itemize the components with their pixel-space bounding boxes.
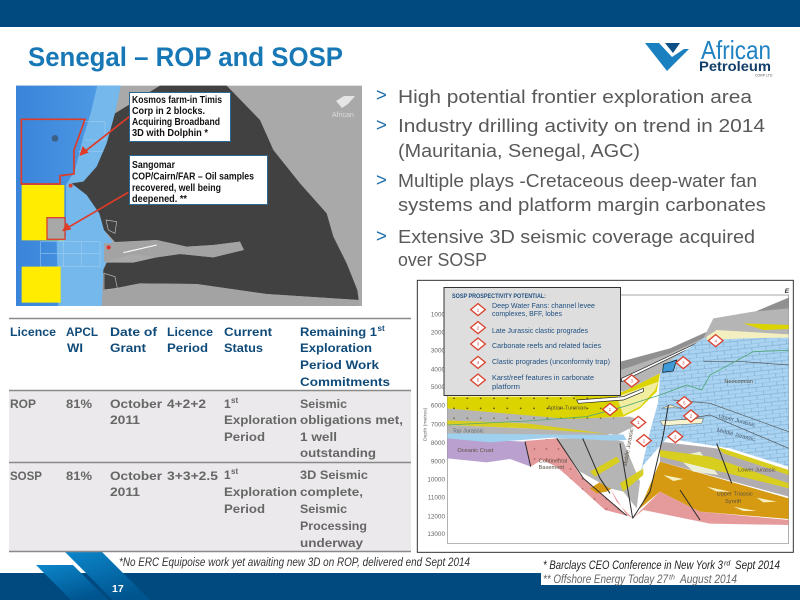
bottom footer band <box>0 573 800 600</box>
depth axis: 1000 <box>431 311 445 318</box>
table row: ROP: outstanding <box>300 446 376 460</box>
table header row: Licence <box>167 325 213 339</box>
bullet list: > <box>376 225 387 246</box>
bullet list: systems and platform margin carbonates <box>398 194 766 215</box>
callout: Kosmos farm-in: 3D with Dolphin * <box>132 128 208 139</box>
depth axis: 8000 <box>431 440 445 447</box>
formation labels: Upper Jurassic <box>718 414 756 429</box>
table row: ROP: 1 <box>224 397 231 411</box>
bullet list: > <box>376 114 387 135</box>
callout: Sangomar: COP/Cairn/FAR – Oil samples <box>132 172 254 182</box>
table header row: Current <box>224 325 272 339</box>
footnotes: sources <box>541 556 800 586</box>
callout: Sangomar: Sangomar <box>132 160 175 171</box>
footnotes: sources: August 2014 <box>679 574 737 586</box>
footnotes: sources: th <box>669 574 675 582</box>
numbered diamond markers: 5 <box>683 400 686 405</box>
table row: SOSP: 3+3+2.5 <box>167 469 218 483</box>
panel: Senegal map <box>16 86 362 306</box>
table row: ROP: Seismic <box>300 397 347 411</box>
formation labels: Continental <box>539 458 567 464</box>
bullet list: (Mauritania, Senegal, AGC) <box>398 140 640 161</box>
footnotes: sources: rd <box>724 560 731 568</box>
bullet list: High potential frontier exploration area <box>398 86 753 107</box>
table row: ROP: October <box>110 397 162 411</box>
table row: SOSP: st <box>231 467 238 476</box>
legend: SOSP prospectivity potential: Clastic progrades (unconformity trap) <box>492 359 610 366</box>
depth axis: 7000 <box>431 421 445 428</box>
legend: SOSP prospectivity potential: Carbonate reefs and related facies <box>492 343 602 350</box>
footnotes: sources: Sept 2014 <box>735 560 780 572</box>
legend: SOSP prospectivity potential: Late Jurassic clastic progrades <box>492 328 588 335</box>
callout: Kosmos farm-in <box>130 92 230 142</box>
callout: Kosmos farm-in: Acquiring Broadband <box>132 117 220 128</box>
table row: ROP: Exploration <box>224 413 297 427</box>
numbered diamond markers: 1 <box>609 407 612 412</box>
table row: ROP: Period <box>224 430 265 444</box>
table header row: Status <box>224 341 263 355</box>
table header row: Remaining 1 <box>300 325 377 339</box>
legend: SOSP prospectivity potential: SOSP PROSPECTIVITY POTENTIAL: <box>452 293 546 300</box>
footnotes: sources: ** Offshore Energy Today 27 <box>543 574 669 586</box>
legend: SOSP prospectivity potential: 4 <box>477 360 480 365</box>
table row: SOSP: October <box>110 469 162 483</box>
table header row: Licence <box>10 325 56 339</box>
callout: Sangomar: recovered, well being <box>132 183 221 194</box>
table row: ROP: 1 well <box>300 430 337 444</box>
panel: Senegal map: African <box>332 112 354 119</box>
Senegal land mass <box>72 86 359 300</box>
formation labels: Middle Jurassic <box>623 427 635 467</box>
legend: SOSP prospectivity potential: platform <box>492 384 520 391</box>
table header row: Grant <box>110 341 146 355</box>
Senegal South yellow block <box>22 267 61 303</box>
logo: African Petroleum <box>645 35 773 78</box>
table header row: Commitments <box>300 375 390 389</box>
Saloum delta marks <box>104 220 117 290</box>
bullet list: over SOSP <box>398 249 487 270</box>
bullet list <box>376 84 766 270</box>
table row: ROP <box>10 396 403 460</box>
legend: SOSP prospectivity potential: 2 <box>477 325 480 330</box>
block grid <box>41 122 105 267</box>
formation labels <box>452 379 776 505</box>
ROP red outline <box>21 119 85 184</box>
footnote: ERC Equipoise: *No ERC Equipoise work yet awaiting new 3D on ROP, delivered end Sept 2014 <box>119 557 470 569</box>
table header row <box>10 324 390 389</box>
formation labels: Synrift <box>725 499 741 505</box>
table row: ROP: ROP <box>10 397 36 411</box>
formation labels: Aptian-Turonian <box>547 406 587 412</box>
depth axis: 6000 <box>431 403 445 410</box>
bullet list: Extensive 3D seismic coverage acquired <box>398 226 755 247</box>
table row: ROP: 4+2+2 <box>167 397 206 411</box>
bullet list: > <box>376 169 387 190</box>
numbered diamond markers <box>603 335 723 447</box>
legend: SOSP prospectivity potential: Deep Water Fans: channel levee <box>492 303 595 310</box>
table row: SOSP: 3D Seismic <box>300 468 368 482</box>
numbered diamond markers: 1 <box>643 438 646 443</box>
table row: SOSP: 2011 <box>110 485 140 499</box>
logo: African Petroleum: African <box>701 35 771 65</box>
table row: SOSP: 81% <box>66 469 92 483</box>
table row: SOSP: Exploration <box>224 485 297 499</box>
page number: 17 <box>112 583 124 595</box>
callout: Sangomar <box>130 156 268 205</box>
table header row: WI <box>67 341 83 355</box>
footnotes: sources: * Barclays CEO Conference in New York 3 <box>543 560 724 572</box>
numbered diamond markers: 1 <box>637 420 640 425</box>
callout: Kosmos farm-in: Kosmos farm-in Timis <box>132 95 222 106</box>
table header row: st <box>378 324 385 333</box>
arrow lines <box>66 117 129 229</box>
formation labels: Basement <box>539 465 565 471</box>
numbered diamond markers: 3 <box>630 379 633 384</box>
strata <box>447 438 531 467</box>
top header band <box>0 0 800 27</box>
formation labels: Oceanic Crust <box>457 448 494 454</box>
table row: SOSP: SOSP <box>10 469 42 483</box>
legend: SOSP prospectivity potential <box>444 288 620 396</box>
legend: SOSP prospectivity potential: complexes, BFF, lobes <box>492 311 562 318</box>
depth axis: 11000 <box>428 495 445 502</box>
callout: Kosmos farm-in: Corp in 2 blocks. <box>132 106 205 117</box>
table header row: Exploration <box>300 341 372 355</box>
southern land edge <box>102 283 359 306</box>
table row: SOSP: Processing <box>300 519 367 533</box>
depth axis: 12000 <box>427 513 445 520</box>
Gambia strip <box>104 240 244 262</box>
table row: ROP: 81% <box>66 397 92 411</box>
table header row: APCL <box>66 325 98 339</box>
numbered diamond markers: 3 <box>682 360 685 365</box>
table row: SOSP: 1 <box>224 468 231 482</box>
table header row: Date of <box>110 325 158 339</box>
Rufisque yellow block <box>22 185 64 240</box>
faults <box>525 405 732 520</box>
numbered diamond markers: 2 <box>690 414 693 419</box>
bullet list: > <box>376 84 387 105</box>
numbered diamond markers: 4 <box>714 338 717 343</box>
depth axis: 10000 <box>427 476 445 483</box>
table row: ROP: 2011 <box>110 413 140 427</box>
depth axis: 5000 <box>431 384 445 391</box>
formation labels: Neocomian <box>724 379 753 385</box>
legend: SOSP prospectivity potential: 1 <box>477 307 480 312</box>
depth axis: 3000 <box>431 348 445 355</box>
Sangomar grey block <box>47 218 65 239</box>
depth axis <box>423 311 445 538</box>
depth axis: 2000 <box>431 330 445 337</box>
table row: SOSP <box>10 467 368 550</box>
green marker horizon <box>447 350 789 425</box>
formation labels: Middle Jurassic <box>716 428 756 443</box>
bullet list: Multiple plays -Cretaceous deep-water fan <box>398 170 757 191</box>
legend: SOSP prospectivity potential: 5 <box>477 378 480 383</box>
table row: SOSP: underway <box>300 536 363 550</box>
formation labels: Upper Triassic <box>717 492 753 498</box>
panel: geological cross-section <box>417 280 793 552</box>
continental shelf <box>57 86 121 306</box>
licence table <box>9 318 411 552</box>
logo: African Petroleum: CORP LTD <box>755 74 773 78</box>
panel: geological cross-section: E <box>785 288 790 295</box>
depth axis: Depth (metres) <box>423 407 429 441</box>
ocean <box>16 86 121 306</box>
depth axis: 4000 <box>431 366 445 373</box>
formation labels: Lower Jurassic <box>738 468 776 474</box>
callout: Sangomar: deepened. ** <box>132 194 187 205</box>
table row: SOSP: Period <box>224 502 265 516</box>
logo: African Petroleum: Petroleum <box>699 58 771 74</box>
table row: ROP: st <box>231 396 238 405</box>
depth axis: 13000 <box>427 531 445 538</box>
table header row: Period Work <box>300 358 379 372</box>
bullet list: Industry drilling activity on trend in 2014 <box>398 115 765 136</box>
title: Senegal – ROP and SOSP <box>28 42 343 72</box>
depth axis: 9000 <box>431 458 445 465</box>
formation labels: Top Jurassic <box>452 429 484 435</box>
table row: SOSP: Seismic <box>300 502 347 516</box>
footer chevrons <box>36 552 150 600</box>
legend: SOSP prospectivity potential: Karst/reef features in carbonate <box>492 375 594 382</box>
table row: ROP: obligations met, <box>300 413 403 427</box>
legend: SOSP prospectivity potential: 3 <box>477 342 480 347</box>
numbered diamond markers: 2 <box>674 434 677 439</box>
table row: SOSP: complete, <box>300 485 363 499</box>
table header row: Period <box>167 341 208 355</box>
